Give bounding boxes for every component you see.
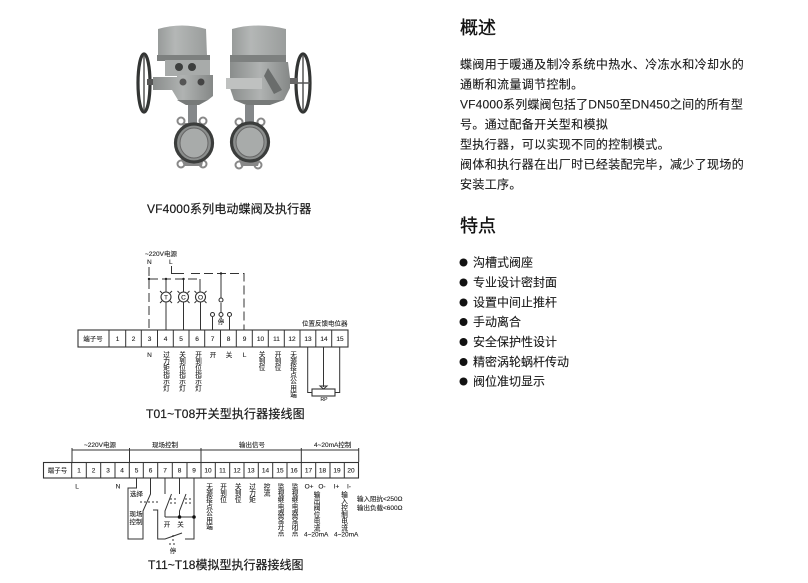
- power supply wiring: [145, 249, 244, 330]
- terminal strip 2: 19: [333, 468, 341, 474]
- heading: features: 特点: [460, 216, 496, 236]
- photo: left electric butterfly valve: [138, 26, 213, 168]
- selector and local control switches: 控制: [130, 517, 143, 526]
- terminal strip 2: N: [116, 484, 121, 490]
- output and control labels: 输入阻抗<250Ω: [357, 494, 403, 503]
- text block: overview: [460, 56, 744, 192]
- terminal function labels: 关: [226, 350, 233, 359]
- selector and local control switches: 停: [170, 546, 177, 555]
- group brackets: ~220V电源: [84, 440, 116, 449]
- terminal function labels: 无源接点公用端: [288, 351, 297, 399]
- list: features: 专业设计密封面: [473, 274, 557, 290]
- terminal strip 2: 6: [149, 468, 153, 474]
- terminal strip 2: 12: [233, 468, 241, 474]
- feedback potentiometer: RP: [321, 397, 328, 403]
- output and control labels: O-: [318, 484, 326, 490]
- group brackets: [72, 440, 359, 462]
- indicator lamps T C O: [160, 291, 206, 303]
- output and control labels: 监视继电器常开点: [276, 482, 284, 538]
- terminal strip 2: 18: [319, 468, 326, 474]
- group brackets: 现场控制: [152, 440, 178, 449]
- list: features: [460, 254, 569, 388]
- photo: right electric butterfly valve: [226, 26, 310, 168]
- terminal strip 1: 6: [195, 336, 199, 343]
- selector and local control switches: [128, 478, 196, 555]
- terminal function labels: N: [147, 352, 152, 359]
- local control contacts: [210, 274, 232, 330]
- terminal strip 2: 15: [276, 468, 284, 474]
- terminal strip 2: 8: [178, 468, 182, 474]
- terminal strip 1: 11: [273, 336, 280, 343]
- terminal function labels: 开到位: [273, 351, 281, 371]
- terminal strip 2: [44, 462, 358, 490]
- text block: overview: VF4000系列蝶阀包括了DN50至DN450之间的所有型: [460, 96, 743, 112]
- terminal strip 2: 端子号: [48, 466, 68, 474]
- group brackets: 输出信号: [239, 440, 266, 449]
- selector and local control switches: 关: [177, 520, 184, 528]
- terminal strip 2: 2: [92, 468, 96, 474]
- terminal strip 1: 5: [179, 336, 183, 343]
- terminal strip 1: 3: [148, 336, 152, 343]
- output and control labels: 输入控制电流: [340, 490, 348, 532]
- terminal strip 2: 13: [247, 468, 255, 474]
- text block: overview: 蝶阀用于暖通及制冷系统中热水、冷冻水和冷却水的: [460, 56, 744, 72]
- indicator lamps T C O: O: [198, 294, 203, 302]
- list: features: 沟槽式阀座: [473, 254, 533, 270]
- text block: overview: 阀体和执行器在出厂时已经装配完毕，减少了现场的: [460, 156, 744, 172]
- terminal strip 1: 2: [132, 336, 136, 343]
- output and control labels: I+: [334, 484, 340, 490]
- terminal strip 2: 14: [262, 468, 269, 474]
- list: features: 安全保护性设计: [473, 334, 557, 349]
- terminal strip 2: 20: [347, 468, 355, 474]
- selector and local control switches: 开: [164, 520, 171, 528]
- text block: overview: 安装工序。: [460, 176, 522, 192]
- selector and local control switches: 现场: [130, 509, 143, 518]
- terminal strip 2: 10: [204, 468, 212, 474]
- list: features: 手动离合: [473, 314, 521, 329]
- feedback potentiometer: [302, 318, 348, 403]
- indicator lamps T C O: C: [181, 294, 186, 302]
- output and control labels: 开到位: [218, 483, 227, 503]
- terminal strip 1: 9: [243, 336, 247, 343]
- terminal function labels: 开到位指示灯: [194, 351, 202, 392]
- list: features: 设置中间止推杆: [473, 294, 557, 310]
- terminal strip 2: 4: [120, 468, 124, 474]
- group brackets: 4~20mA控制: [314, 440, 352, 449]
- text block: overview: 号。通过配备开关型和模拟: [460, 118, 608, 132]
- text block: overview: 型执行器，可以实现不同的控制模式。: [460, 136, 670, 152]
- terminal strip 2: 11: [219, 468, 226, 474]
- terminal strip 1: [78, 330, 348, 347]
- output and control labels: 输出负载<600Ω: [357, 503, 403, 512]
- output and control labels: 4~20mA: [334, 532, 359, 538]
- output and control labels: I-: [347, 484, 351, 490]
- terminal strip 2: 5: [135, 468, 139, 474]
- heading: overview: 概述: [460, 18, 496, 38]
- power supply wiring: N: [147, 259, 152, 266]
- feedback potentiometer: 位置反馈电位器: [302, 318, 348, 328]
- terminal strip 1: 7: [211, 336, 215, 343]
- terminal strip 2: 9: [192, 468, 196, 474]
- output and control labels: 4~20mA: [304, 532, 329, 538]
- output and control labels: 无源接点公用端: [204, 483, 213, 531]
- output and control labels: [204, 482, 403, 538]
- terminal strip 1: 15: [336, 336, 344, 343]
- output and control labels: 监视继电器常闭点: [290, 482, 298, 538]
- text block: overview: 通断和流量调节控制。: [460, 76, 584, 92]
- terminal function labels: L: [243, 352, 247, 359]
- output and control labels: 输出阀位电流: [312, 490, 320, 532]
- output and control labels: 控流: [262, 482, 270, 498]
- indicator lamps T C O: T: [164, 294, 168, 302]
- terminal strip 1: 4: [164, 336, 168, 343]
- terminal strip 2: 7: [163, 468, 167, 474]
- terminal strip 2: 1: [77, 468, 81, 474]
- terminal function labels: [147, 350, 297, 399]
- caption: T11~T18 diagram: T11~T18模拟型执行器接线图: [148, 557, 303, 572]
- caption: T01~T08 diagram: T01~T08开关型执行器接线图: [146, 406, 305, 421]
- terminal strip 1: 1: [116, 336, 120, 343]
- power supply wiring: ~220V电源: [145, 249, 177, 258]
- terminal function labels: 关到位: [257, 350, 265, 371]
- output and control labels: 关到位: [233, 482, 241, 503]
- local control contacts: 停: [218, 317, 225, 326]
- terminal strip 1: 14: [320, 336, 328, 343]
- terminal strip 1: 10: [257, 336, 264, 343]
- list: features: 精密涡轮蜗杆传动: [473, 354, 569, 369]
- terminal function labels: 关到位指示灯: [178, 350, 186, 392]
- terminal strip 1: 13: [304, 336, 312, 343]
- selector and local control switches: 选择: [130, 489, 144, 498]
- terminal strip 2: L: [75, 484, 79, 490]
- terminal strip 2: 3: [106, 468, 110, 474]
- terminal function labels: 开: [210, 351, 217, 359]
- terminal function labels: 过力矩指示灯: [162, 350, 170, 392]
- power supply wiring: L: [169, 259, 173, 266]
- wiring diagram: T01~T08 switch type: [78, 249, 348, 403]
- terminal strip 1: 8: [227, 336, 231, 343]
- output and control labels: 过力矩: [248, 482, 256, 504]
- list: features: 阀位准切显示: [473, 374, 545, 388]
- terminal strip 2: 16: [290, 468, 298, 474]
- output and control labels: O+: [305, 484, 314, 490]
- wiring diagram: T11~T18 analog type: [44, 440, 403, 555]
- terminal strip 1: 端子号: [83, 334, 103, 343]
- caption: valve photo: VF4000系列电动蝶阀及执行器: [147, 201, 311, 216]
- terminal strip 1: 12: [288, 336, 296, 343]
- terminal strip 2: 17: [305, 468, 312, 474]
